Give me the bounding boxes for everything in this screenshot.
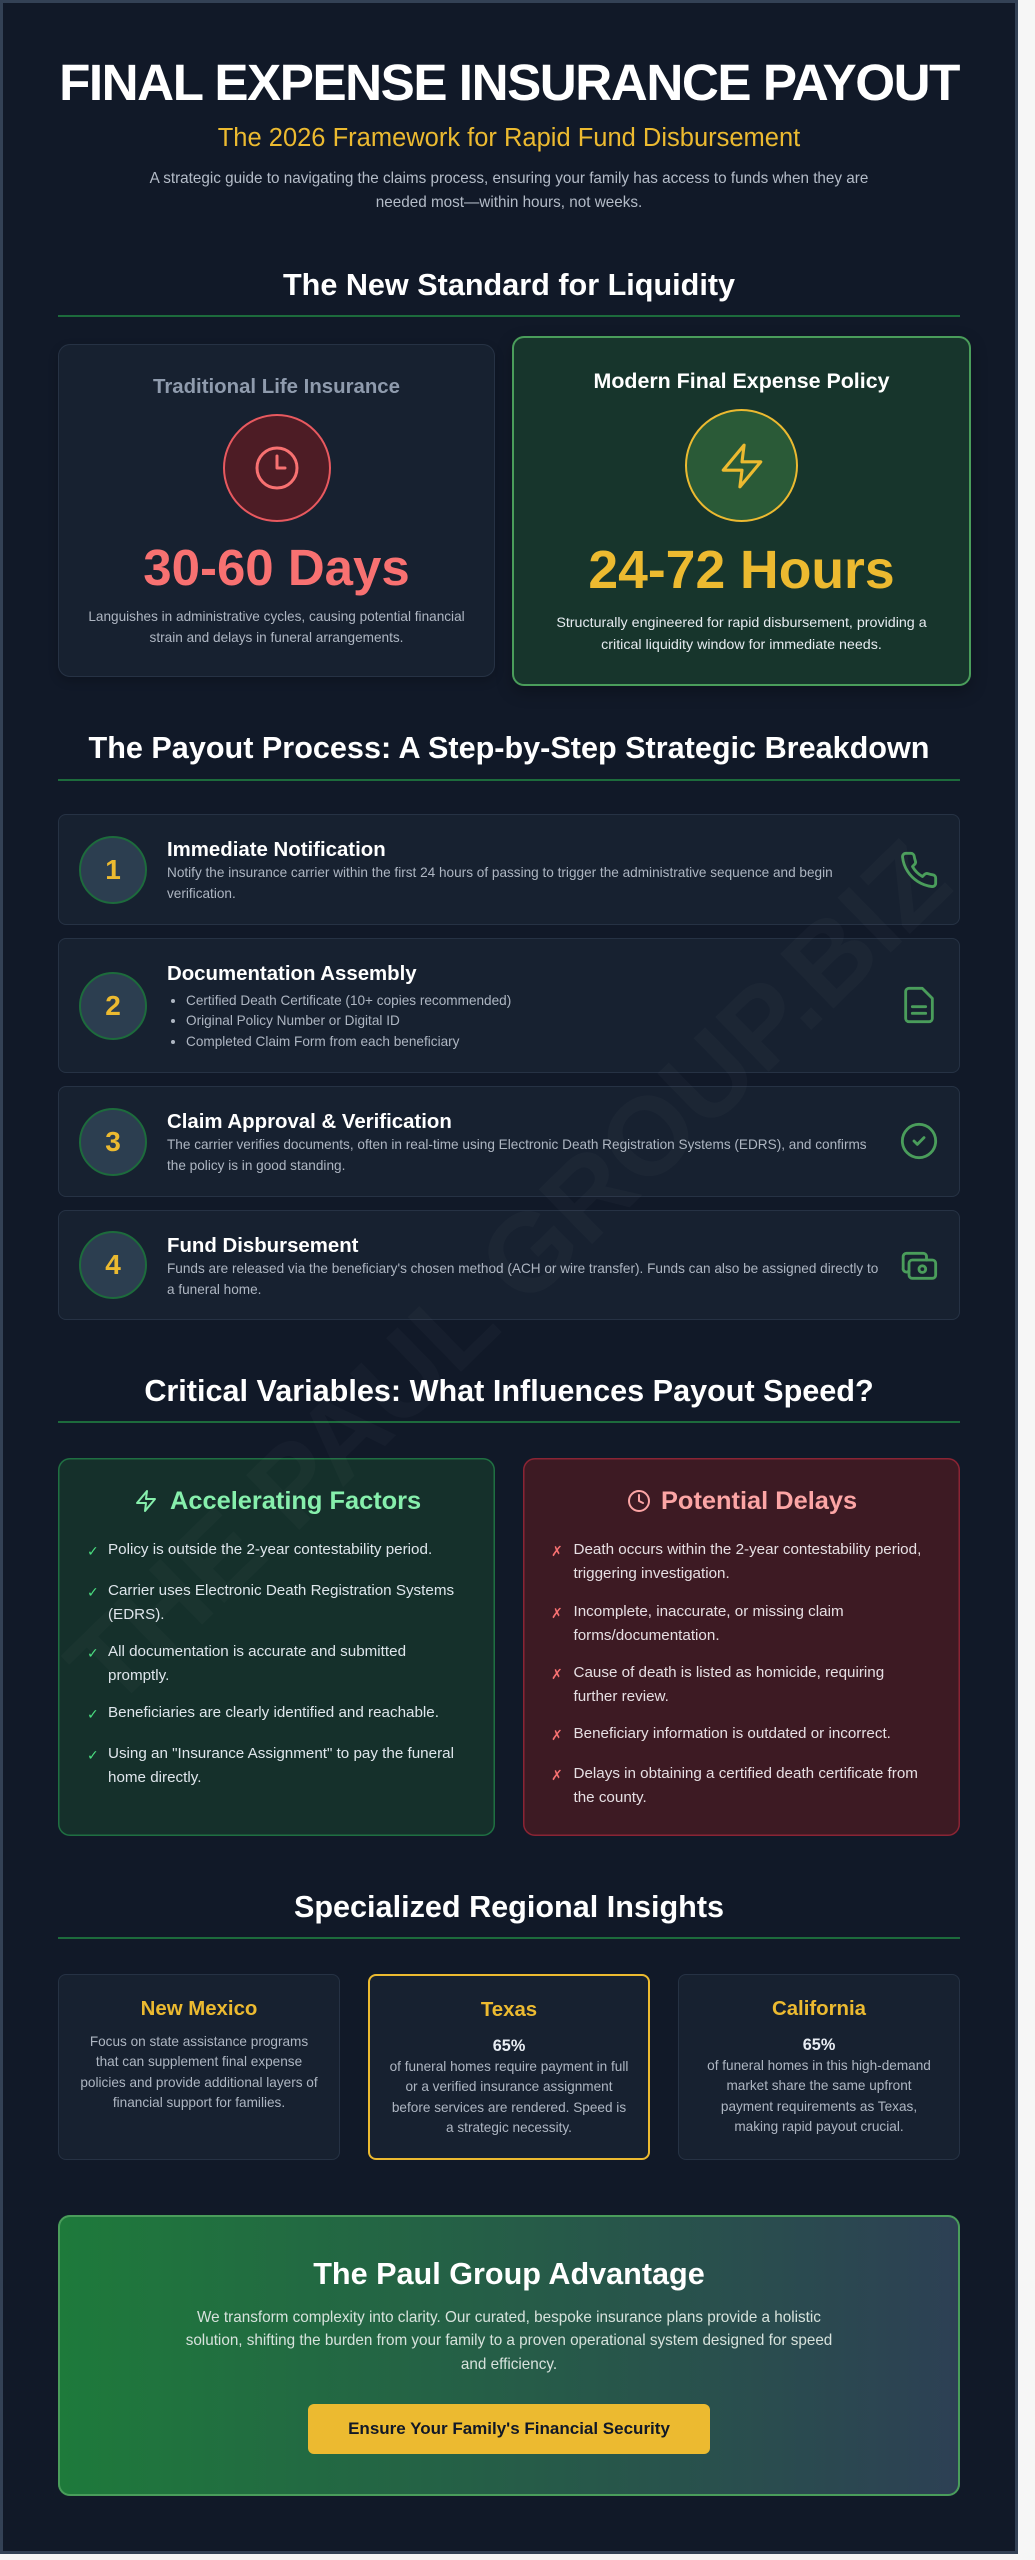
call to action text — [186, 2308, 832, 2373]
step title: Immediate Notification — [167, 839, 386, 861]
state text: payment requirements as Texas, — [721, 2099, 917, 2114]
state heading: Texas — [481, 1999, 537, 2021]
section heading: the payout process: The Payout Process: A Step-by-Step Strategic Breakdown — [89, 731, 929, 765]
card description: Structurally engineered for rapid disbursement, providing a — [556, 615, 927, 631]
step description: The carrier verifies documents, often in real-time using Electronic Death Registration Systems (EDRS), and confirms — [167, 1137, 867, 1152]
delay list: the county. — [574, 1788, 647, 1806]
step 1: immediate notification — [58, 814, 960, 925]
button: Ensure Your Family's Financial Security — [348, 2419, 670, 2438]
delay list: Incomplete, inaccurate, or missing claim — [574, 1602, 844, 1620]
delay list: Cause of death is listed as homicide, requiring — [574, 1664, 884, 1680]
step number — [79, 836, 147, 904]
statistic: 65% — [803, 2036, 835, 2054]
step description — [167, 1261, 878, 1296]
state text: Focus on state assistance programs — [90, 2034, 308, 2049]
state text: making rapid payout crucial. — [734, 2119, 904, 2134]
step number: 1 — [105, 854, 121, 885]
call to action text: We transform complexity into clarity. Our curated, bespoke insurance plans provide a holistic — [197, 2308, 821, 2326]
panel: california — [678, 1974, 960, 2160]
state text: market share the same upfront — [726, 2078, 912, 2093]
icon: lightning bolt — [685, 409, 798, 522]
document checklist: Original Policy Number or Digital ID — [186, 1013, 400, 1028]
delay list: ✗ — [551, 1666, 563, 1682]
factor list: promptly. — [108, 1666, 169, 1684]
state text — [707, 2058, 931, 2134]
intro text: A strategic guide to navigating the claims process, ensuring your family has access to funds when they are — [150, 170, 868, 187]
state heading: California — [772, 1998, 866, 2020]
panel heading: Accelerating Factors — [170, 1487, 421, 1515]
button — [308, 2404, 710, 2454]
panel: accelerating factors — [58, 1458, 495, 1836]
delay list — [551, 1540, 921, 1806]
step 4: fund disbursement — [58, 1210, 960, 1320]
factor list: ✓ — [87, 1646, 99, 1662]
delay list: further review. — [574, 1688, 669, 1704]
step number: 2 — [105, 990, 121, 1020]
icon: clock — [628, 1490, 650, 1512]
step description — [167, 1137, 867, 1173]
step description: Notify the insurance carrier within the first 24 hours of passing to trigger the administrative sequence and begin — [167, 865, 833, 880]
step number — [79, 1231, 147, 1299]
card description — [88, 609, 465, 645]
factor list: ✓ — [87, 1748, 99, 1764]
factor list: All documentation is accurate and submitted — [108, 1642, 406, 1660]
factor list: (EDRS). — [108, 1606, 165, 1622]
factor list: ✓ — [87, 1584, 99, 1600]
step number — [79, 1108, 147, 1176]
title: FINAL EXPENSE INSURANCE PAYOUT — [59, 54, 959, 111]
step description: verification. — [167, 886, 236, 900]
stat: 24-72 hours: 24-72 Hours — [588, 541, 895, 600]
step description: a funeral home. — [167, 1282, 261, 1296]
state text: or a verified insurance assignment — [405, 2079, 613, 2094]
card heading: Traditional Life Insurance — [153, 376, 400, 398]
step description — [167, 865, 833, 900]
step title: Claim Approval & Verification — [167, 1111, 452, 1133]
card description — [556, 615, 927, 652]
panel: new mexico — [58, 1974, 340, 2160]
intro text: needed most—within hours, not weeks. — [376, 194, 642, 211]
step number: 4 — [105, 1249, 121, 1280]
factor list: Using an "Insurance Assignment" to pay the funeral — [108, 1744, 454, 1762]
call to action text: solution, shifting the burden from your family to a proven operational system designed for speed — [186, 2332, 832, 2349]
delay list: forms/documentation. — [574, 1626, 720, 1644]
delay list: Delays in obtaining a certified death certificate from — [574, 1764, 918, 1782]
panel heading: Potential Delays — [661, 1487, 857, 1515]
document checklist: Certified Death Certificate (10+ copies recommended) — [186, 992, 511, 1008]
state text: before services are rendered. Speed is — [392, 2100, 626, 2115]
panel: potential delays — [523, 1458, 960, 1836]
delay list: ✗ — [551, 1544, 563, 1560]
factor list: Beneficiaries are clearly identified and reachable. — [108, 1704, 439, 1720]
step description: Funds are released via the beneficiary's chosen method (ACH or wire transfer). Funds can also be assigned directly to — [167, 1261, 878, 1276]
icon: clock — [222, 414, 330, 522]
delay list: ✗ — [551, 1768, 563, 1784]
panel: the paul group advantage — [58, 2215, 960, 2496]
state text: of funeral homes in this high-demand — [707, 2058, 931, 2073]
delay list: Beneficiary information is outdated or incorrect. — [574, 1724, 891, 1742]
document checklist: Completed Claim Form from each beneficiary — [186, 1034, 459, 1048]
factor list: Policy is outside the 2-year contestability period. — [108, 1540, 432, 1558]
state text — [80, 2034, 318, 2110]
card description: Languishes in administrative cycles, causing potential financial — [88, 609, 465, 624]
step title: Documentation Assembly — [167, 963, 417, 985]
statistic: 65% — [493, 2036, 525, 2054]
panel: texas — [368, 1974, 650, 2160]
state heading: New Mexico — [141, 1998, 257, 2020]
factor list: ✓ — [87, 1544, 99, 1560]
icon: check circle — [900, 1122, 938, 1160]
section heading: critical variables: Critical Variables: What Influences Payout Speed? — [144, 1374, 874, 1408]
state text: policies and provide additional layers of — [80, 2075, 318, 2090]
card heading: Modern Final Expense Policy — [594, 368, 889, 392]
state text: financial support for families. — [113, 2095, 285, 2110]
card description: strain and delays in funeral arrangements. — [150, 630, 403, 644]
delay list: Death occurs within the 2-year contestability period, — [574, 1540, 921, 1558]
call to action text: and efficiency. — [461, 2356, 557, 2373]
document checklist — [171, 992, 511, 1049]
factor list: home directly. — [108, 1768, 201, 1786]
card description: critical liquidity window for immediate needs. — [601, 636, 882, 652]
watermark: THE PAUL GROUP.BIZ — [43, 817, 972, 1728]
section heading: the new standard for liquidity: The New Standard for Liquidity — [283, 268, 735, 302]
step 3: claim approval and verification — [58, 1086, 960, 1196]
call to action heading: The Paul Group Advantage — [313, 2256, 705, 2290]
state text: a strategic necessity. — [446, 2120, 572, 2135]
icon: document — [904, 986, 934, 1024]
state text: of funeral homes require payment in full — [390, 2059, 628, 2074]
stat: 30-60 days: 30-60 Days — [143, 538, 410, 596]
delay list: triggering investigation. — [574, 1564, 730, 1582]
state text — [390, 2059, 628, 2135]
step title: Fund Disbursement — [167, 1235, 358, 1257]
factor list: Carrier uses Electronic Death Registration Systems — [108, 1582, 454, 1598]
icon: phone — [901, 852, 938, 888]
subtitle: The 2026 Framework for Rapid Fund Disbursement — [218, 124, 800, 152]
factor list: ✓ — [87, 1706, 99, 1722]
step 2: documentation assembly — [58, 938, 960, 1072]
section heading: specialized regional insights: Specialized Regional Insights — [294, 1890, 724, 1924]
panel: traditional life insurance — [58, 344, 495, 677]
step description: the policy is in good standing. — [167, 1158, 345, 1172]
delay list: ✗ — [551, 1606, 563, 1622]
state text: that can supplement final expense — [96, 2054, 302, 2069]
icon: bolt — [136, 1490, 156, 1512]
step number: 3 — [105, 1126, 121, 1156]
icon: money — [902, 1252, 938, 1280]
intro text — [150, 170, 868, 211]
delay list: ✗ — [551, 1728, 563, 1744]
step number — [79, 972, 147, 1040]
panel: modern final expense policy — [512, 336, 971, 686]
factor list — [87, 1540, 454, 1786]
